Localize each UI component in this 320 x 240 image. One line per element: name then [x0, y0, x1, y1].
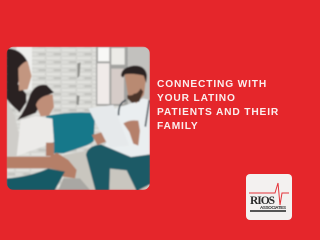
window: [96, 47, 128, 106]
woman face: [18, 61, 32, 91]
woman hair: [7, 48, 29, 112]
logo subtitle: ASSOCIATES: [260, 205, 286, 210]
stethoscope: [119, 100, 149, 127]
logo wordmark: RIOS: [250, 195, 275, 207]
logo strapline bar: [250, 210, 286, 212]
document: [88, 104, 115, 142]
sofa: [46, 112, 95, 153]
right wall: [128, 46, 150, 104]
woman shirt: [7, 104, 19, 156]
girl shirt: [17, 116, 54, 156]
title: [157, 79, 279, 132]
panel: consultation photo: [6, 46, 150, 190]
girl arm: [46, 143, 54, 156]
doctor head: [121, 66, 147, 103]
title: PATIENTS AND THEIR: [157, 107, 279, 118]
girl hair: [17, 85, 54, 120]
sofa seat: [63, 149, 150, 190]
girl face: [36, 94, 54, 116]
doctor hands: [92, 120, 140, 146]
woman arm and hands: [7, 153, 77, 178]
doctor coat: [103, 98, 150, 160]
woman jeans: [7, 168, 65, 190]
logo: Rios & Associates: [246, 174, 292, 220]
title: YOUR LATINO: [157, 93, 236, 104]
title: FAMILY: [157, 121, 199, 132]
title: CONNECTING WITH: [157, 79, 267, 90]
doctor legs: [86, 144, 150, 191]
left window: [17, 47, 32, 90]
girl leg: [58, 178, 90, 190]
brick wall: [7, 47, 150, 190]
icon: heartbeat line: [249, 183, 289, 205]
